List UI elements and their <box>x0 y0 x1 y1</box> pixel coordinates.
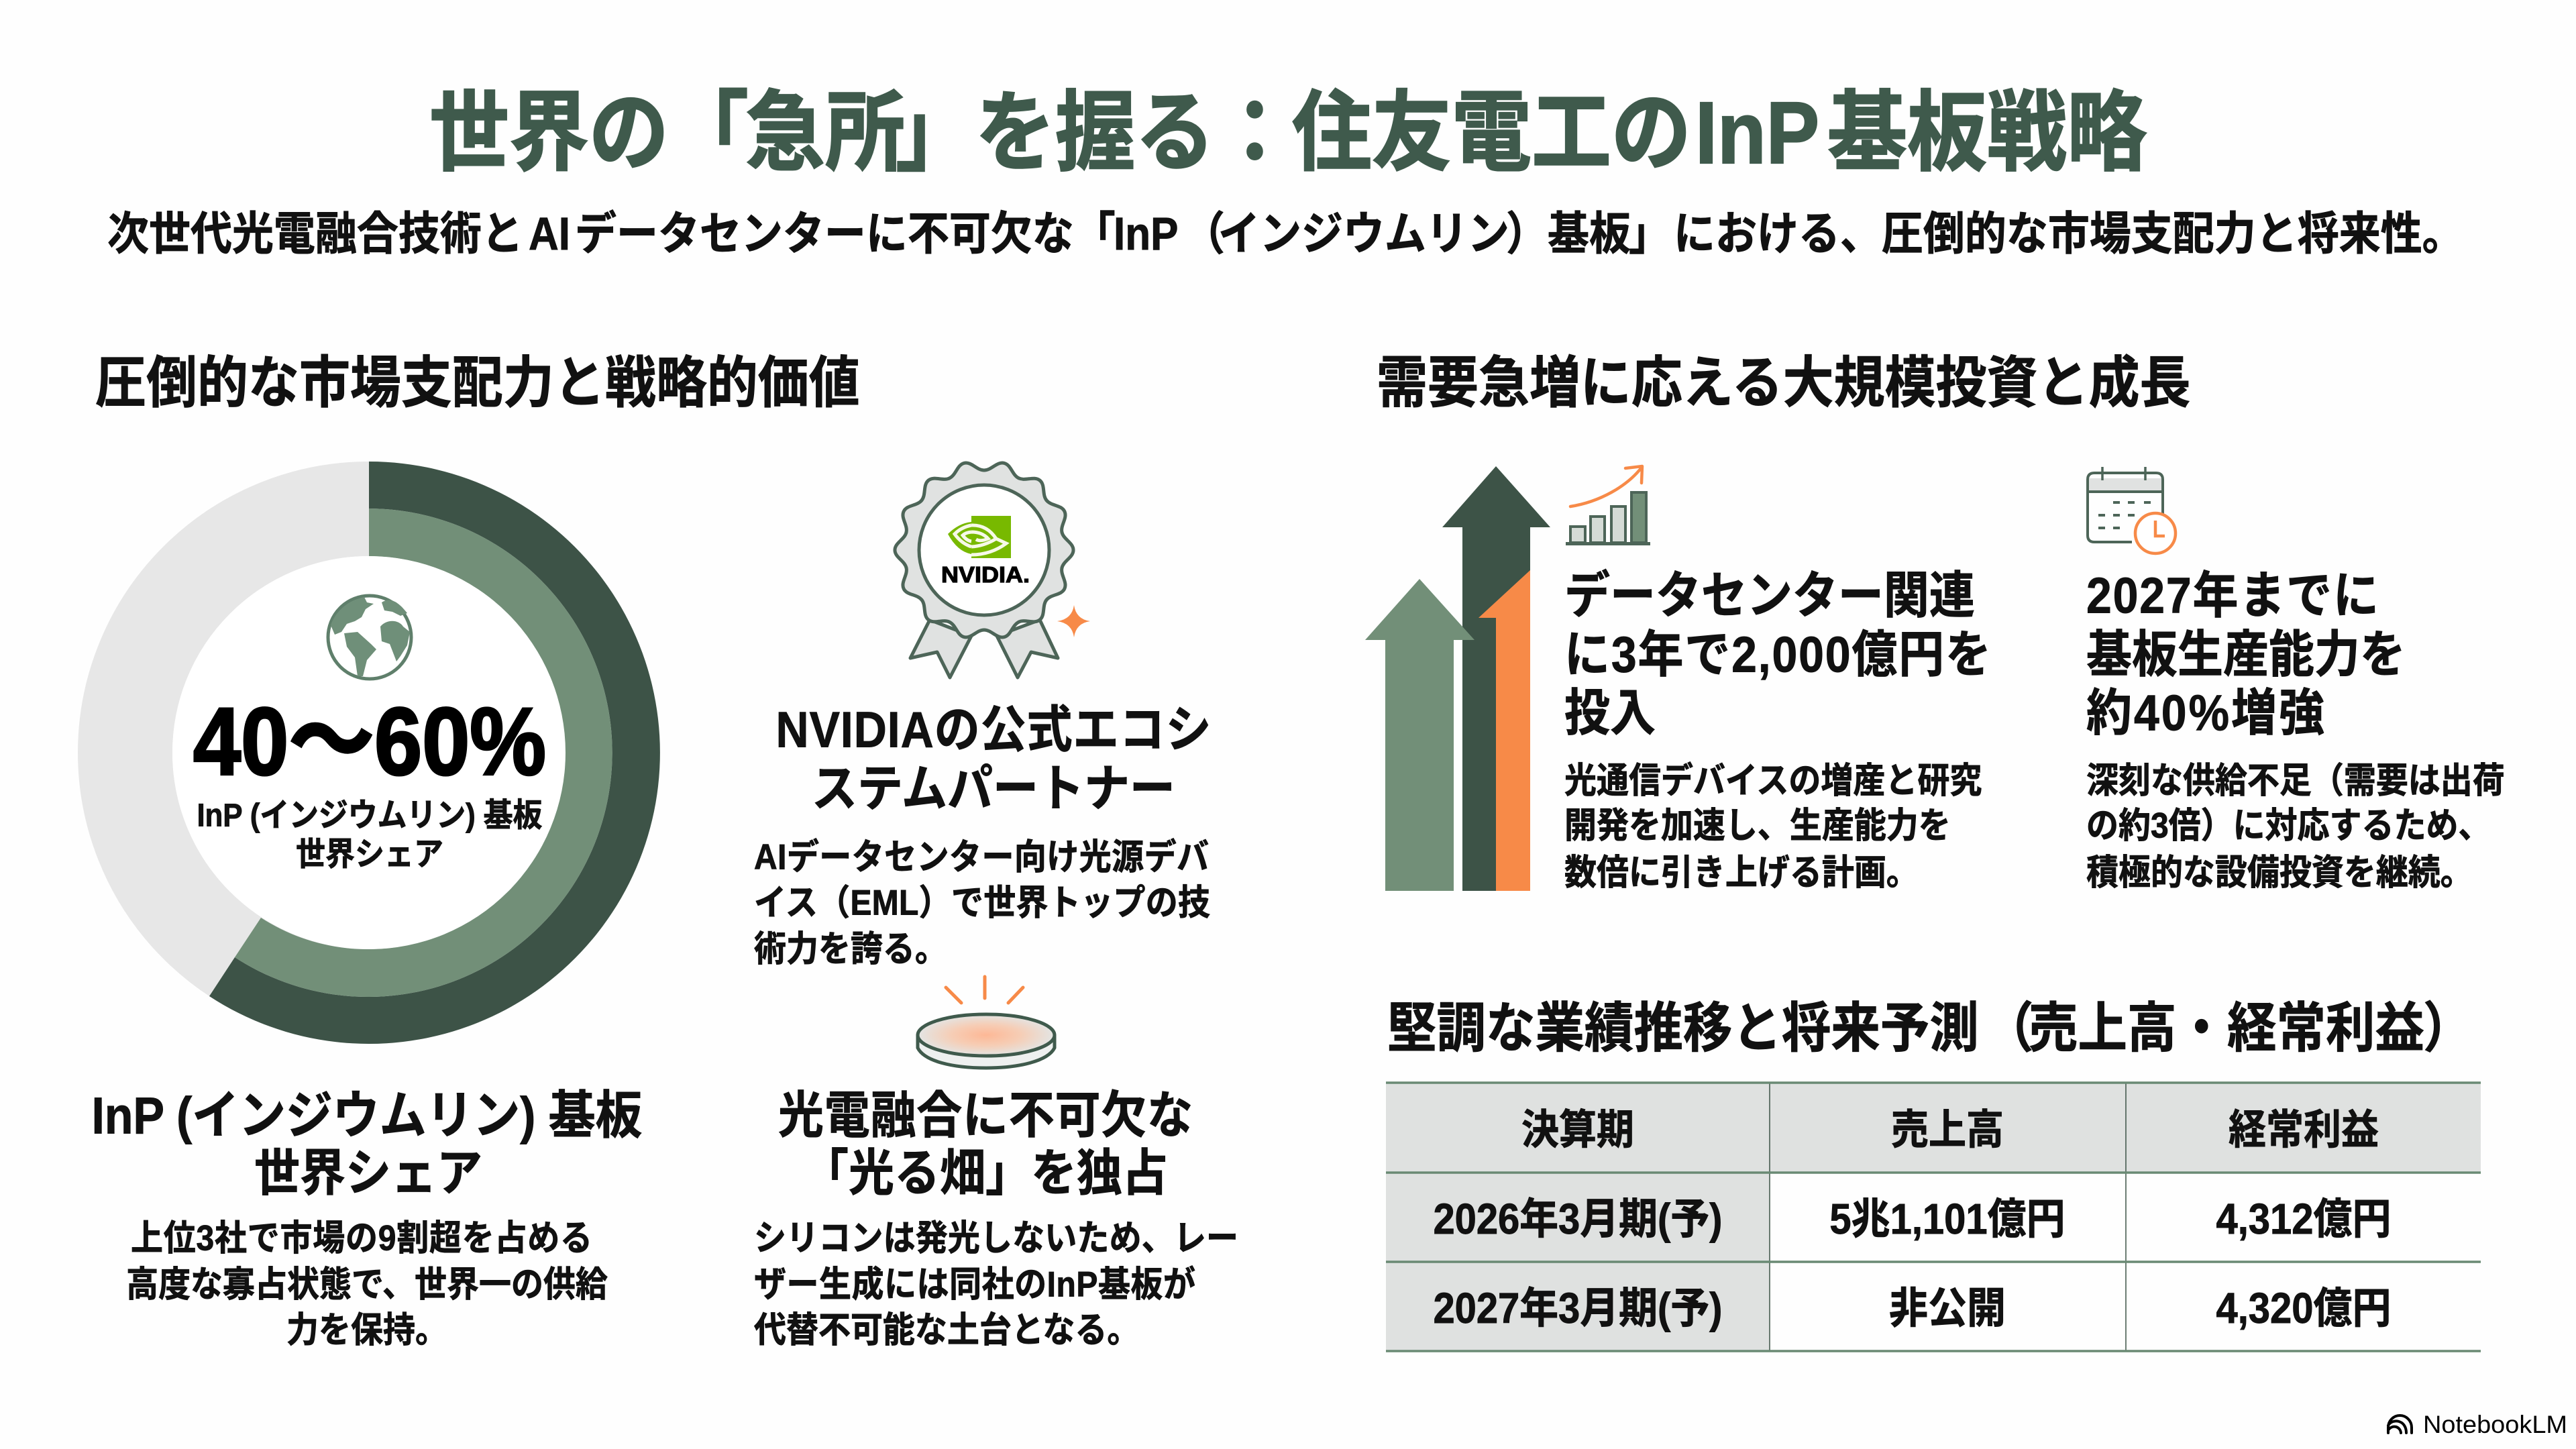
table header row <box>1521 1107 2379 1152</box>
text block: capacity increase: 2027年までに <box>2086 568 2379 624</box>
text block: capacity increase: 基板生産能力を <box>2086 627 2406 683</box>
text block: light farm: シリコンは発光しないため、レー <box>754 1218 1238 1258</box>
text block: capacity increase: 深刻な供給不足（需要は出荷 <box>2086 761 2505 800</box>
icon: NVIDIA badge <box>892 456 1077 678</box>
heading: results forecast: 堅調な業績推移と将来予測 <box>1387 998 1979 1059</box>
title: を握る： <box>975 84 1295 182</box>
table header row: 経常利益 <box>2229 1107 2379 1152</box>
donut chart: InP world share <box>125 462 660 1044</box>
text block: InP share description: 世界シェア <box>254 1145 482 1201</box>
subtitle: データセンターに不可欠な「 <box>575 208 1116 260</box>
subtitle: インジウムリン <box>1218 208 1509 260</box>
share label <box>197 797 542 872</box>
heading: results forecast: ） <box>2423 998 2472 1059</box>
text block: capacity increase: 積極的な設備投資を継続。 <box>2086 853 2473 892</box>
text block: light farm: 「光る畑」を独占 <box>803 1145 1168 1201</box>
share label: 世界シェア <box>296 836 443 872</box>
share label: InP (インジウムリン) 基板 <box>197 797 542 833</box>
heading: results forecast: 売上高 <box>2029 998 2176 1059</box>
icon: glowing wafer <box>918 977 1055 1068</box>
title: 世界の「 <box>429 84 749 182</box>
text block: light farm: 光電融合に不可欠な <box>778 1087 1193 1144</box>
text block: light farm: 代替不可能な土台となる。 <box>754 1310 1139 1350</box>
table row 2027: 2027年3月期(予) <box>1434 1284 1723 1332</box>
text block: capacity increase: の約3倍）に対応するため、 <box>2086 806 2490 845</box>
text block: 2000 oku investment: 数倍に引き上げる計画。 <box>1564 853 1919 892</box>
text block: 2000 oku investment <box>1564 568 1991 892</box>
icon: orange sparkle <box>1057 605 1090 637</box>
subtitle: における、圧倒的な市場支配力と将来性。 <box>1674 208 2464 260</box>
table header row: 売上高 <box>1891 1107 2004 1152</box>
heading: results forecast: （ <box>1984 998 2033 1059</box>
heading: market dominance: 圧倒的な市場支配力と戦略的価値 <box>95 352 860 414</box>
text block: NVIDIA partner: イス（EML）で世界トップの技 <box>754 883 1210 922</box>
table row 2026: 5兆1,101億円 <box>1829 1195 2065 1243</box>
text block: InP share description: 力を保持。 <box>286 1310 447 1350</box>
text block: NVIDIA partner: AIデータセンター向け光源デバ <box>754 837 1209 877</box>
title: 」 <box>896 84 975 182</box>
table row 2026: 4,312億円 <box>2216 1195 2392 1243</box>
title: 住友電工の <box>1292 84 1691 182</box>
table row 2027: 非公開 <box>1889 1284 2006 1332</box>
text block: NVIDIA partner: ステムパートナー <box>812 761 1175 817</box>
icon: globe <box>328 596 411 679</box>
text block: light farm: ザー生成には同社のInP基板が <box>754 1265 1195 1304</box>
icon: rising arrows <box>1365 466 1550 891</box>
title: 急所 <box>745 84 905 182</box>
text block: 2000 oku investment: データセンター関連 <box>1564 568 1975 624</box>
icon: NVIDIA badge: NVIDIA. <box>941 562 1030 587</box>
icon: calendar with clock <box>2088 467 2176 553</box>
text block: InP share description: 高度な寡占状態で、世界一の供給 <box>126 1265 608 1304</box>
icon: bar chart with growth line <box>1566 466 1650 545</box>
table row 2026 <box>1434 1195 2392 1243</box>
text block: capacity increase <box>2086 568 2505 892</box>
subtitle: AI <box>529 208 570 260</box>
heading: results forecast: ・ <box>2177 998 2226 1059</box>
text block: 2000 oku investment: 光通信デバイスの増産と研究 <box>1564 761 1982 800</box>
subtitle: ） <box>1506 208 1548 260</box>
text block: light farm <box>754 1087 1238 1350</box>
text block: InP share description: 上位3社で市場の9割超を占める <box>131 1218 592 1258</box>
subtitle: InP <box>1114 208 1178 260</box>
title: InP <box>1695 84 1819 182</box>
share value: 40〜60% <box>193 688 546 795</box>
NotebookLM logo: NotebookLM <box>2423 1411 2567 1438</box>
subtitle: 」 <box>1629 208 1670 260</box>
subtitle: 基板 <box>1548 208 1631 260</box>
subtitle: （ <box>1183 208 1225 260</box>
table row 2027 <box>1434 1284 2392 1332</box>
text block: InP share description: InP (インジウムリン) 基板 <box>92 1086 643 1144</box>
text block: 2000 oku investment: 開発を加速し、生産能力を <box>1564 806 1951 845</box>
title: 基板戦略 <box>1827 84 2147 182</box>
text block: 2000 oku investment: に3年で2,000億円を <box>1564 627 1991 683</box>
subtitle: 次世代光電融合技術と <box>107 208 523 260</box>
text block: NVIDIA partner: NVIDIAの公式エコシ <box>775 702 1212 758</box>
table header row: 決算期 <box>1521 1107 1634 1152</box>
table row 2027: 4,320億円 <box>2216 1284 2392 1332</box>
text block: NVIDIA partner <box>754 702 1212 969</box>
text block: InP share description <box>92 1086 643 1350</box>
heading: investment and growth: 需要急増に応える大規模投資と成長 <box>1377 352 2190 414</box>
text block: NVIDIA partner: 術力を誇る。 <box>754 929 947 969</box>
table: sales and profit forecast <box>1386 1083 2481 1351</box>
text block: 2000 oku investment: 投入 <box>1564 685 1656 741</box>
text block: capacity increase: 約40%増強 <box>2086 685 2324 741</box>
table row 2026: 2026年3月期(予) <box>1434 1195 1723 1243</box>
heading: results forecast: 経常利益 <box>2227 998 2424 1059</box>
